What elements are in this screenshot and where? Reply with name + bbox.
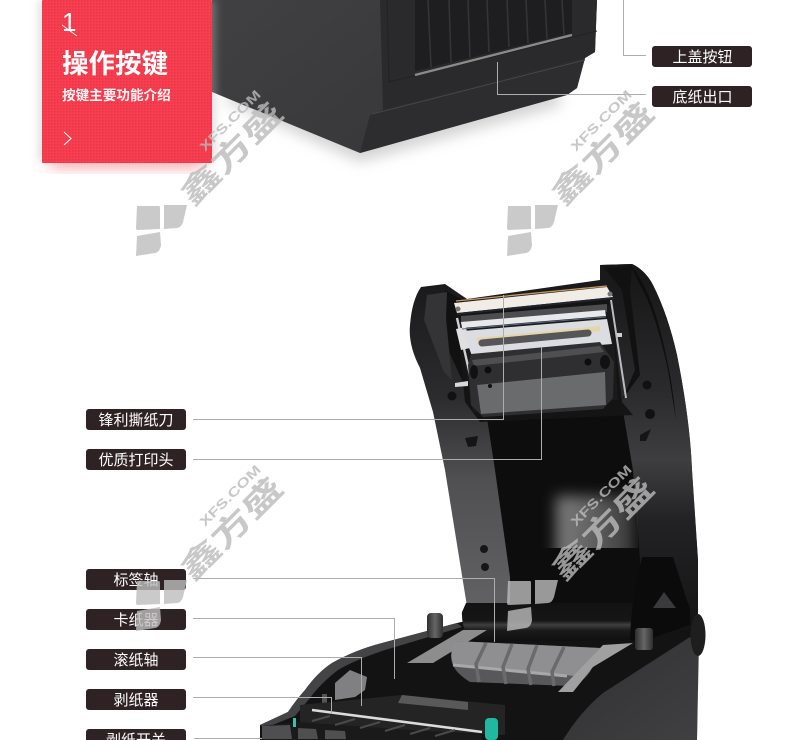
label: peel switch xyxy=(86,729,186,740)
label: platen roller: 滚纸轴 xyxy=(113,652,159,669)
watermarks xyxy=(136,87,661,631)
label: tear blade xyxy=(86,409,186,430)
watermark: top right xyxy=(507,87,661,256)
top printer shadow xyxy=(222,90,560,162)
platform xyxy=(300,695,505,735)
black strip on print head xyxy=(482,333,588,343)
labels xyxy=(86,46,752,740)
top printer vent panel xyxy=(415,0,572,75)
card heading: 操作按键 xyxy=(62,49,168,79)
label: peeler: 剥纸器 xyxy=(113,692,159,709)
label: print head: 优质打印头 xyxy=(98,452,174,469)
label: peeler xyxy=(86,689,186,710)
top printer body xyxy=(212,0,597,153)
watermark: bottom right xyxy=(507,462,661,631)
left paper strip xyxy=(407,630,487,663)
panel: red title card xyxy=(38,0,216,166)
watermark: top left xyxy=(136,87,290,256)
number one: 1 xyxy=(62,7,76,37)
label spindle xyxy=(462,603,690,642)
label: upper cover button: 上盖按钮 xyxy=(672,49,733,66)
gear roller xyxy=(451,641,600,686)
label: paper clamp: 卡纸器 xyxy=(113,612,159,629)
leader lines xyxy=(193,0,646,738)
platen rod xyxy=(312,710,482,732)
label: label spindle xyxy=(86,569,186,590)
right base housing xyxy=(563,637,699,740)
hinge arch xyxy=(630,557,690,642)
label: platen roller xyxy=(86,649,186,670)
interior reflection xyxy=(556,496,634,576)
label: print head xyxy=(86,449,186,470)
right paper strip xyxy=(558,643,633,692)
right lid wall xyxy=(600,264,698,625)
lower printer lid xyxy=(410,264,698,625)
print head assembly xyxy=(454,286,633,422)
label: upper cover button xyxy=(652,46,752,67)
label: backing paper outlet xyxy=(652,86,752,107)
lid interior xyxy=(487,405,640,625)
label: backing paper outlet: 底纸出口 xyxy=(672,89,733,106)
label: label spindle: 标签轴 xyxy=(113,572,159,589)
paper clamp xyxy=(335,670,367,700)
card subheading: 按键主要功能介绍 xyxy=(62,87,171,103)
lower printer base xyxy=(260,557,706,740)
icon: chevron xyxy=(64,132,71,145)
icon: teal switch xyxy=(485,718,498,740)
watermark: bottom left xyxy=(136,462,290,631)
label: tear blade: 锋利撕纸刀 xyxy=(98,412,174,429)
icon: hinge knob xyxy=(690,614,706,656)
label: paper clamp xyxy=(86,609,186,630)
